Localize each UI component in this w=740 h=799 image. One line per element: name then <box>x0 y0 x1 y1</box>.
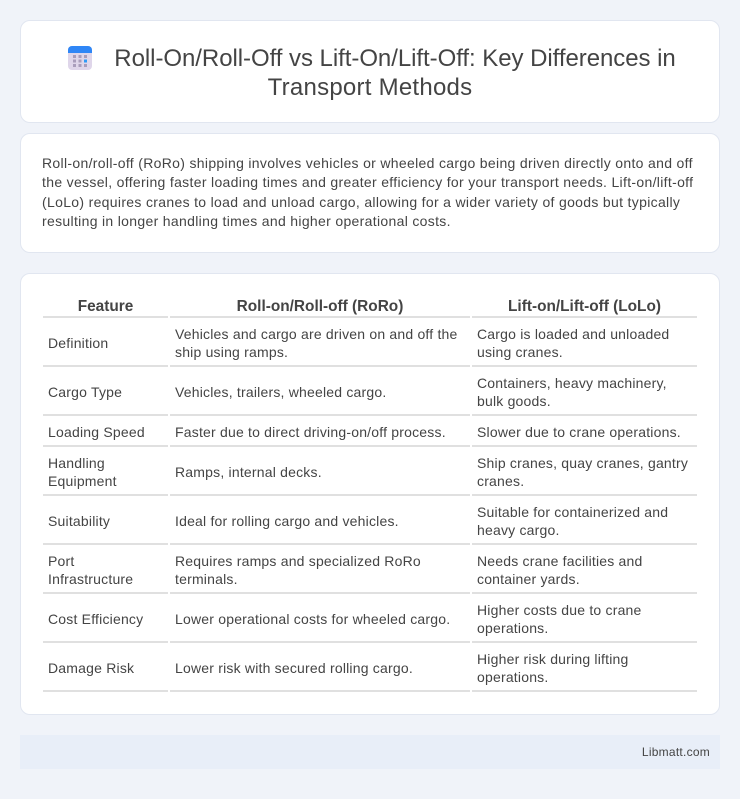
table: feature comparison: Damage Risk <box>48 660 134 676</box>
icon: calendar <box>68 46 92 70</box>
table: feature comparison: bulk goods. <box>477 392 551 408</box>
table: feature comparison: Suitable for containerized and <box>477 504 668 520</box>
title <box>114 45 676 101</box>
title: Transport Methods <box>268 74 472 101</box>
table: feature comparison: Lower operational costs for wheeled cargo. <box>175 610 450 626</box>
table: feature comparison: Infrastructure <box>48 570 133 586</box>
footer: source: Libmatt.com <box>642 745 710 759</box>
table: feature comparison: Ship cranes, quay cranes, gantry <box>477 454 688 470</box>
table: feature comparison: Definition <box>48 334 108 350</box>
table: feature comparison: Equipment <box>48 472 117 488</box>
table: feature comparison: Slower due to crane operations. <box>477 424 681 440</box>
footer: source <box>20 735 720 769</box>
text block: introduction: (LoLo) requires cranes to load and unload cargo, allowing for a wider variety of goods but typically <box>42 194 680 210</box>
table: feature comparison: operations. <box>477 620 548 636</box>
table: feature comparison: Ideal for rolling cargo and vehicles. <box>175 512 399 528</box>
text block: introduction: Roll-on/roll-off (RoRo) shipping involves vehicles or wheeled cargo being driven directly onto and off <box>42 154 693 170</box>
table: feature comparison <box>43 298 697 692</box>
table: feature comparison: Suitability <box>48 512 110 528</box>
table: feature comparison: Cargo Type <box>48 384 122 400</box>
table: feature comparison: Loading Speed <box>48 424 145 440</box>
table: feature comparison: Faster due to direct driving-on/off process. <box>175 424 446 440</box>
table: feature comparison: Cost Efficiency <box>48 610 143 626</box>
text block: introduction <box>42 154 694 229</box>
table: feature comparison: Containers, heavy machinery, <box>477 374 667 390</box>
panel: comparison table <box>20 273 720 715</box>
table: feature comparison: Needs crane facilities and <box>477 552 643 568</box>
table: feature comparison: container yards. <box>477 570 580 586</box>
table: feature comparison: heavy cargo. <box>477 522 560 538</box>
table: feature comparison: Lift-on/Lift-off (LoLo) <box>508 298 661 315</box>
table: feature comparison: cranes. <box>477 472 524 488</box>
table: feature comparison: Vehicles, trailers, wheeled cargo. <box>175 384 386 400</box>
table: feature comparison: Cargo is loaded and unloaded <box>477 326 669 342</box>
table: feature comparison: Higher risk during lifting <box>477 650 628 666</box>
table: feature comparison: Higher costs due to crane <box>477 602 642 618</box>
table: feature comparison: using cranes. <box>477 344 563 360</box>
text block: introduction: resulting in longer handling times and higher operational costs. <box>42 213 451 229</box>
table: feature comparison: terminals. <box>175 570 238 586</box>
table: feature comparison: Ramps, internal decks. <box>175 464 322 480</box>
table: feature comparison: Handling <box>48 454 105 470</box>
text block: introduction: the vessel, offering faster loading times and greater efficiency for your transport needs. Lift-on/lift-off <box>42 174 693 190</box>
table: feature comparison: Port <box>48 552 74 568</box>
table: feature comparison: ship using ramps. <box>175 344 288 360</box>
table: feature comparison: Feature <box>78 298 133 315</box>
table: feature comparison: Vehicles and cargo are driven on and off the <box>175 326 458 342</box>
table: feature comparison: operations. <box>477 668 548 684</box>
table: feature comparison: Requires ramps and specialized RoRo <box>175 552 421 568</box>
table: feature comparison: Roll-on/Roll-off (RoRo) <box>237 298 403 315</box>
panel: title card <box>20 20 720 123</box>
title: Roll-On/Roll-Off vs Lift-On/Lift-Off: Key Differences in <box>114 45 676 72</box>
panel: introduction <box>20 133 720 253</box>
table: feature comparison: Lower risk with secured rolling cargo. <box>175 660 413 676</box>
